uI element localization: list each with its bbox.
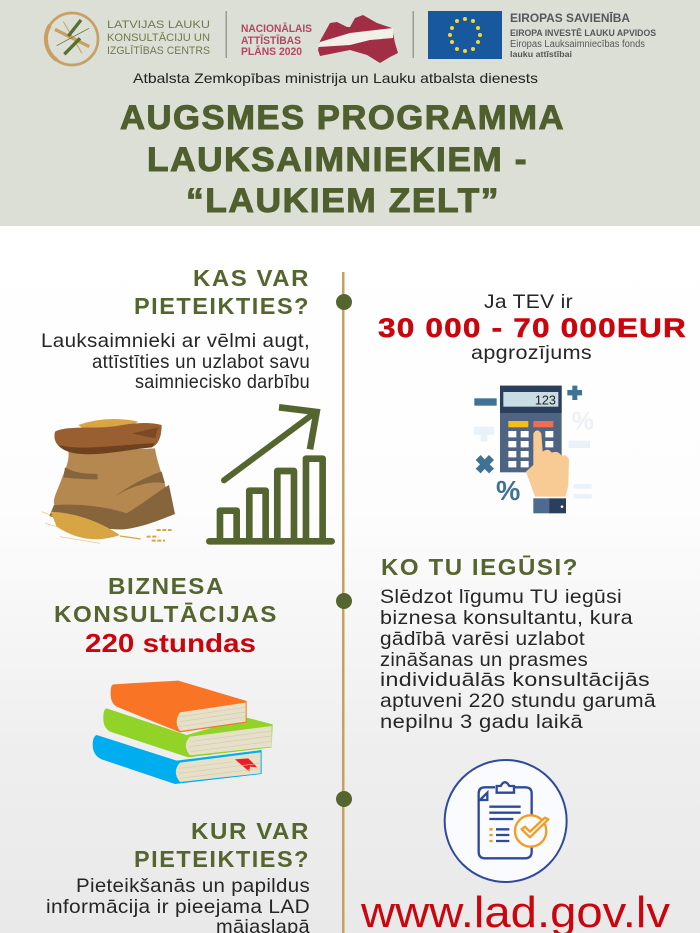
heading: who can apply: KAS VAR bbox=[193, 265, 310, 291]
icon: calculator with hand bbox=[474, 386, 594, 513]
icon: EU flag bbox=[428, 11, 502, 59]
text: what you get: Slēdzot līgumu TU iegūsi bbox=[380, 586, 622, 608]
logo: LLKC emblem bbox=[46, 13, 98, 65]
heading: who can apply bbox=[134, 265, 310, 319]
title: “LAUKIEM ZELT” bbox=[186, 182, 500, 220]
icon: calculator with hand: % bbox=[496, 475, 520, 506]
title bbox=[120, 99, 565, 220]
supporters line: Atbalsta Zemkopības ministrija un Lauku atbalsta dienests bbox=[133, 70, 538, 86]
title: LAUKSAIMNIEKIEM - bbox=[147, 141, 528, 179]
logo text: European Union: EIROPA INVESTĒ LAUKU APVIDOS bbox=[510, 28, 656, 38]
icon: calculator with hand: 123 bbox=[535, 393, 556, 407]
text: applicants bbox=[41, 330, 310, 393]
timeline bbox=[336, 272, 352, 933]
heading: business consultations bbox=[54, 573, 278, 658]
text: where to apply: Pieteikšanās un papildus bbox=[76, 875, 310, 897]
logo text: European Union bbox=[510, 13, 656, 59]
logo text: European Union: lauku attīstībai bbox=[510, 49, 572, 59]
heading: where to apply: KUR VAR bbox=[191, 818, 310, 844]
heading: business consultations: 220 stundas bbox=[85, 628, 256, 658]
logo text: national plan: ATTĪSTĪBAS bbox=[241, 35, 301, 47]
text: what you get: aptuveni 220 stundu garumā bbox=[380, 690, 656, 712]
heading: where to apply: PIETEIKTIES? bbox=[134, 846, 310, 872]
heading: who can apply: PIETEIKTIES? bbox=[134, 293, 310, 319]
logo text: LLKC bbox=[107, 19, 210, 57]
icon: growth chart bbox=[209, 407, 332, 541]
turnover callout bbox=[378, 291, 687, 364]
text: what you get: zināšanas un prasmes bbox=[380, 649, 588, 671]
header band bbox=[0, 0, 700, 226]
icon: clipboard checklist bbox=[445, 760, 567, 882]
text: where to apply: informācija ir pieejama LAD bbox=[46, 896, 310, 918]
text: what you get: nepilnu 3 gadu laikā bbox=[380, 711, 583, 733]
text: what you get: biznesa konsultantu, kura bbox=[380, 607, 633, 629]
page background bbox=[0, 226, 700, 933]
logo text: LLKC: KONSULTĀCIJU UN bbox=[107, 32, 210, 44]
title: AUGSMES PROGRAMMA bbox=[120, 99, 565, 137]
heading: where to apply bbox=[134, 818, 310, 872]
text: where to apply bbox=[46, 875, 310, 933]
logo text: national plan: PLĀNS 2020 bbox=[241, 46, 302, 58]
text: applicants: Lauksaimnieki ar vēlmi augt, bbox=[41, 330, 310, 352]
logo text: LLKC: IZGLĪTĪBAS CENTRS bbox=[107, 45, 210, 57]
text: what you get bbox=[380, 586, 656, 733]
heading: what you get: KO TU IEGŪSI? bbox=[381, 554, 579, 580]
icon: map of Latvia bbox=[318, 15, 398, 63]
logo text: national plan: NACIONĀLAIS bbox=[241, 23, 312, 35]
heading: business consultations: KONSULTĀCIJAS bbox=[54, 601, 278, 627]
turnover callout: 30 000 - 70 000EUR bbox=[378, 313, 687, 343]
text: what you get: individuālās konsultācijās bbox=[380, 669, 650, 691]
icon: calculator with hand: % bbox=[572, 407, 594, 435]
turnover callout: apgrozījums bbox=[471, 342, 592, 364]
text: what you get: gādībā varēsi uzlabot bbox=[380, 628, 585, 650]
icon: stack of books bbox=[93, 681, 273, 784]
icon: grain sack bbox=[42, 419, 175, 543]
logo text: national plan bbox=[241, 23, 312, 58]
logo text: LLKC: LATVIJAS LAUKU bbox=[107, 19, 210, 31]
logo text: European Union: Eiropas Lauksaimniecības fonds bbox=[510, 39, 645, 50]
logo text: European Union: EIROPAS SAVIENĪBA bbox=[510, 13, 630, 25]
text: applicants: attīstīties un uzlabot savu bbox=[92, 351, 310, 373]
text: applicants: saimniecisko darbību bbox=[135, 371, 310, 393]
turnover callout: Ja TEV ir bbox=[484, 291, 573, 313]
heading: business consultations: BIZNESA bbox=[108, 573, 225, 599]
